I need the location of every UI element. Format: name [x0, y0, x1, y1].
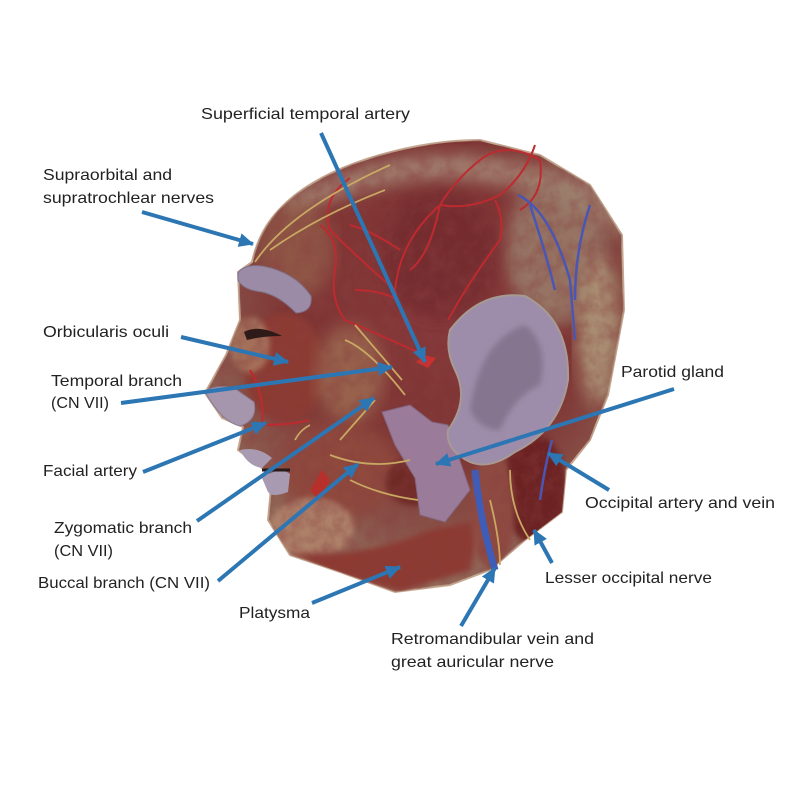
- label: superficial temporal artery: Superficial temporal artery: [201, 106, 410, 123]
- label: supraorbital and supratrochlear nerves: [43, 167, 214, 207]
- eyebrow pad: [238, 266, 311, 313]
- nerves: [255, 165, 530, 565]
- arrow: orbicularis oculi: [181, 337, 288, 362]
- label: parotid gland: Parotid gland: [621, 364, 724, 381]
- labels: [38, 106, 775, 671]
- label: retromandibular vein and great auricular nerve: Retromandibular vein and: [391, 631, 594, 648]
- label: temporal branch: [51, 373, 182, 412]
- label: orbicularis oculi: Orbicularis oculi: [43, 324, 169, 341]
- ear: [448, 295, 568, 464]
- label: supraorbital and supratrochlear nerves: Supraorbital and: [43, 167, 172, 184]
- arrow: retromandibular vein and great auricular nerve: [461, 568, 495, 626]
- arrow: parotid gland: [436, 389, 674, 464]
- label: supraorbital and supratrochlear nerves: supratrochlear nerves: [43, 190, 214, 207]
- arrows: [121, 133, 674, 626]
- lower lip: [262, 471, 290, 495]
- label: temporal branch: (CN VII): [51, 395, 109, 412]
- arrow: buccal branch: [218, 464, 358, 581]
- veins: [518, 195, 590, 500]
- label: zygomatic branch: (CN VII): [54, 543, 113, 560]
- arrow: supraorbital and supratrochlear nerves: [142, 212, 253, 244]
- arteries: [250, 145, 541, 425]
- label: retromandibular vein and great auricular nerve: [391, 631, 594, 671]
- head illustration: [200, 130, 630, 600]
- parotid gland: [382, 405, 470, 522]
- label: zygomatic branch: [54, 520, 192, 560]
- arrow: platysma: [312, 567, 400, 603]
- label: facial artery: Facial artery: [43, 463, 137, 480]
- eye: [244, 329, 282, 340]
- arrow: zygomatic branch: [197, 398, 374, 521]
- nose: [205, 387, 255, 426]
- label: platysma: Platysma: [239, 605, 310, 622]
- label: buccal branch: Buccal branch (CN VII): [38, 575, 210, 592]
- label: temporal branch: Temporal branch: [51, 373, 182, 390]
- label: zygomatic branch: Zygomatic branch: [54, 520, 192, 537]
- arrow: temporal branch: [121, 367, 392, 403]
- label: lesser occipital nerve: Lesser occipital nerve: [545, 570, 712, 587]
- head base: [205, 140, 624, 592]
- arrow: superficial temporal artery: [321, 133, 425, 362]
- tissue shading: [200, 130, 630, 600]
- arrow: occipital artery and vein: [548, 453, 609, 490]
- arrow: lesser occipital nerve: [534, 530, 552, 563]
- label: retromandibular vein and great auricular nerve: great auricular nerve: [391, 654, 554, 671]
- arrow: facial artery: [143, 423, 266, 472]
- label: occipital artery and vein: Occipital artery and vein: [585, 495, 775, 512]
- upper lip: [240, 449, 272, 468]
